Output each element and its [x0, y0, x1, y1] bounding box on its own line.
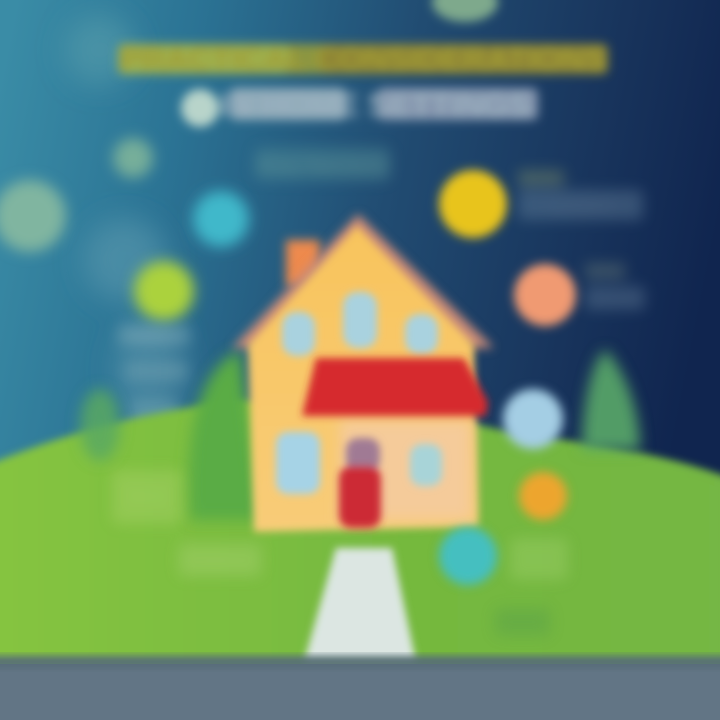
left text block: Safety: [128, 329, 176, 346]
trees and bushes: [80, 350, 640, 520]
lower windows: [276, 432, 442, 494]
ground labels: Space: [126, 487, 168, 503]
icon: lime circle: [134, 261, 194, 321]
path to door: [304, 548, 416, 662]
ground labels: [112, 470, 568, 636]
tree: right: [582, 350, 640, 450]
upper windows: [282, 292, 438, 356]
tree: beside house: [189, 350, 262, 520]
right icons and labels: [439, 170, 645, 326]
tree: left small: [80, 389, 120, 461]
icon: orange circle: [514, 264, 576, 326]
icon: yellow circle: [439, 170, 507, 238]
icon: pale blue circle: [503, 389, 563, 449]
label: yellow item: [518, 170, 643, 220]
icon: pale green circle: [0, 180, 66, 252]
chimney: [286, 240, 320, 286]
roof outline: [232, 214, 494, 348]
house wall: [248, 226, 478, 532]
lower right icons: [439, 389, 567, 585]
icon: teal circle: [439, 527, 497, 585]
label: orange item: Access: [590, 291, 640, 307]
bottom band: [0, 656, 720, 720]
red awning: [302, 358, 488, 416]
label: yellow item: Comfort: [549, 199, 612, 216]
intro text: [255, 148, 390, 180]
lower wall shade: [340, 420, 472, 520]
icon: orange small circle: [519, 472, 567, 520]
ground labels: Outdoors: [188, 552, 252, 568]
ground: green hill: [0, 400, 720, 670]
label: orange item: [585, 263, 645, 310]
left text block: [118, 325, 190, 440]
house: [232, 214, 494, 532]
icon: small green circle: [113, 138, 153, 178]
title: PRACTICAL CONSIDERATIONS: [120, 41, 606, 77]
left icons: [0, 138, 249, 321]
icon: cyan circle: [193, 191, 249, 247]
subtitle: IN HOME SETTINGS: [220, 87, 530, 123]
decorative top circle: [432, 0, 498, 22]
intro text: Key factors: [257, 155, 387, 177]
door: [339, 438, 381, 528]
background faint circles: [65, 15, 186, 425]
